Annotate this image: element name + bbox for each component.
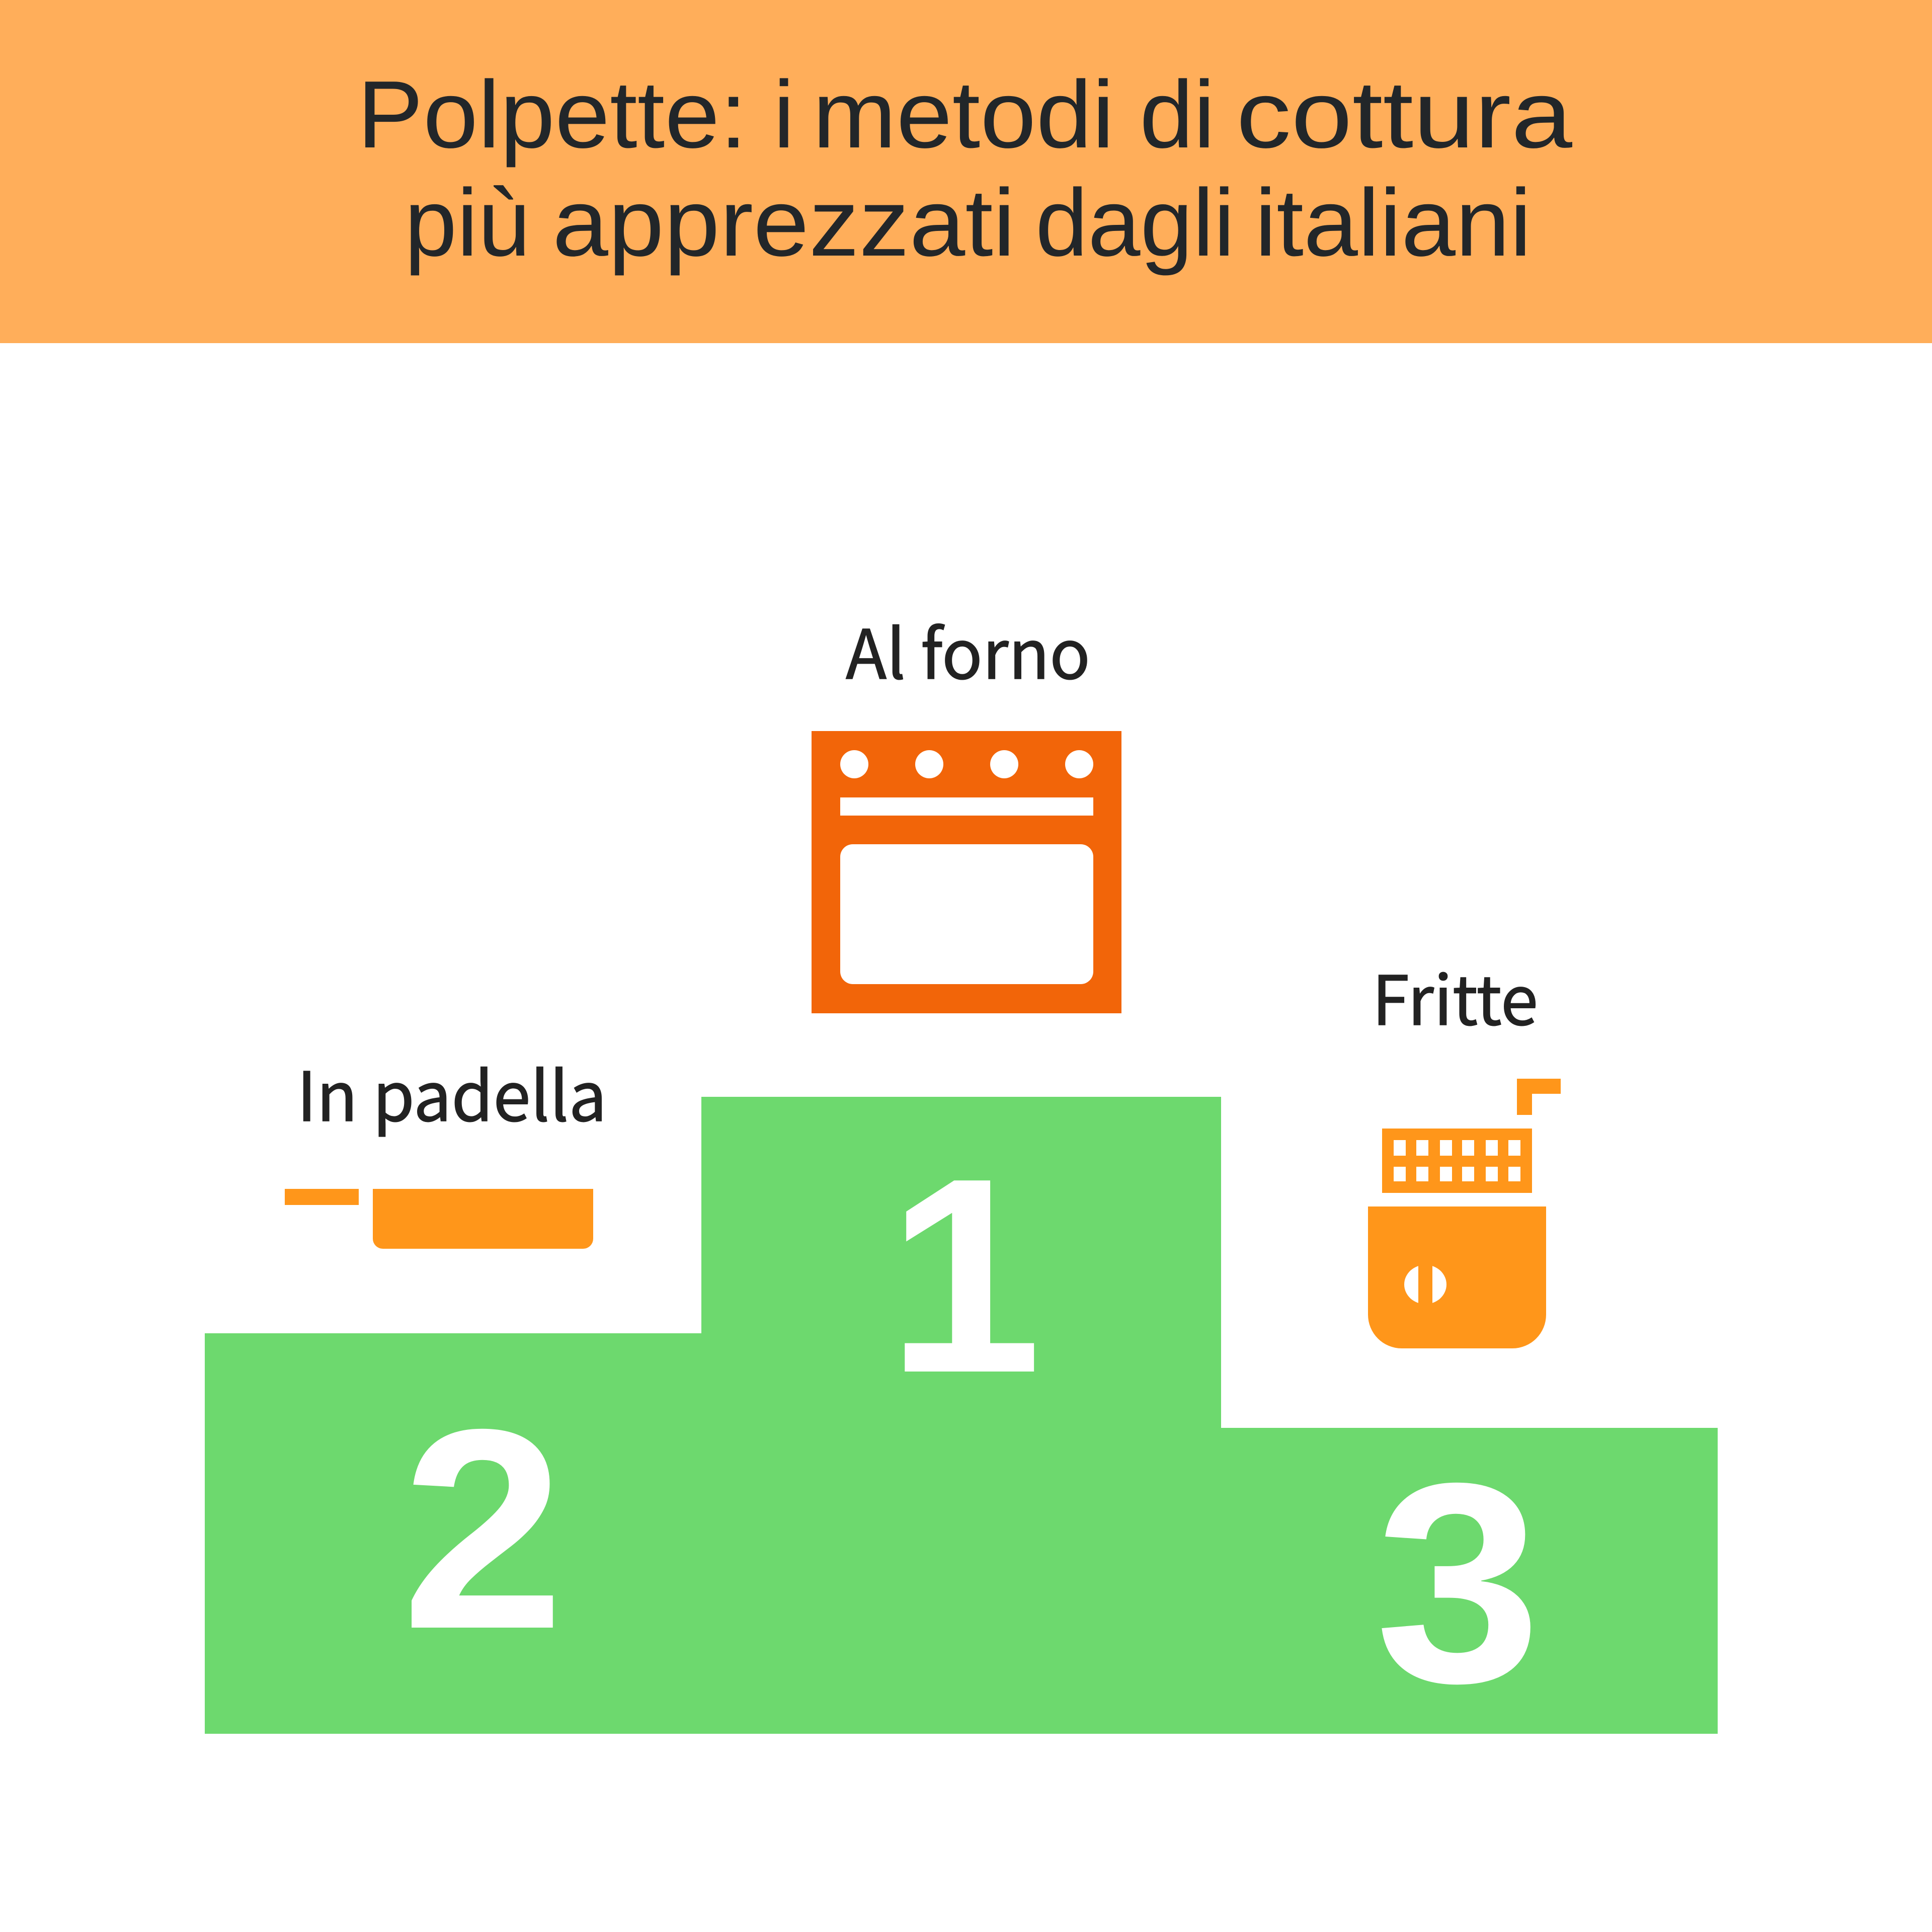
- rank 2: 2: [401, 1370, 565, 1688]
- title: Polpette:: [357, 61, 747, 168]
- podium: [205, 1097, 1718, 1742]
- title: [357, 61, 1572, 276]
- title: cottura: [1236, 61, 1572, 168]
- title: italiani: [1255, 170, 1532, 276]
- title: metodi: [813, 61, 1114, 168]
- title: i: [773, 61, 794, 168]
- rank 3: 3: [1375, 1424, 1541, 1742]
- title: di: [1140, 61, 1215, 168]
- icon: oven: [812, 731, 1121, 1013]
- icon: frying pan: [285, 1189, 593, 1249]
- rank 1: 1: [888, 1120, 1041, 1430]
- title: apprezzati: [552, 170, 1015, 276]
- title: più: [405, 170, 530, 276]
- label: In padella: In padella: [297, 1042, 607, 1141]
- icon: deep fryer: [1368, 1079, 1561, 1348]
- title: dagli: [1035, 170, 1235, 276]
- label: Fritte: Fritte: [1372, 946, 1538, 1044]
- label: Al forno: Al forno: [846, 600, 1090, 698]
- header band with title: [0, 0, 1932, 343]
